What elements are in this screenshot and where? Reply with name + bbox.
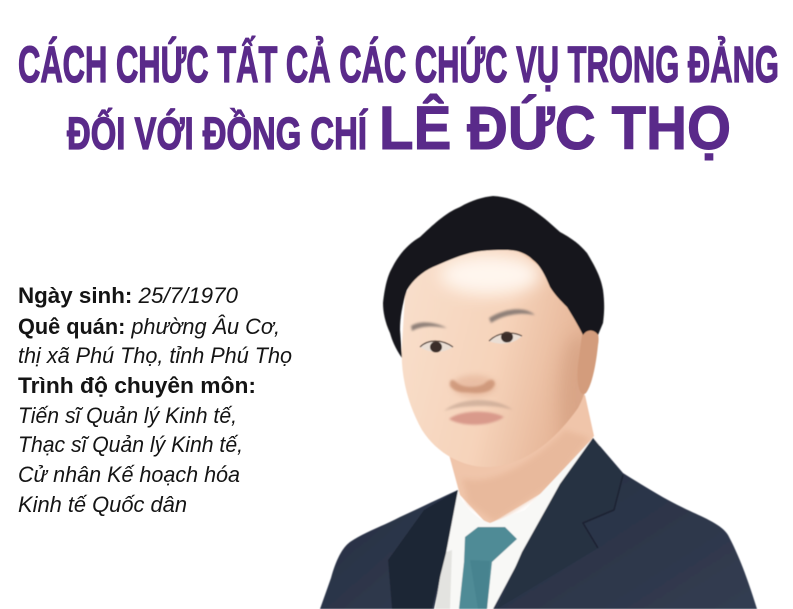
lapel edge [583, 475, 623, 548]
mouth [449, 412, 504, 425]
right eyebrow [489, 309, 535, 323]
left eye [420, 341, 453, 352]
qualification 2: Thạc sĩ Quản lý Kinh tế, [18, 432, 243, 457]
hometown line 2: thị xã Phú Thọ, tỉnh Phú Thọ [18, 343, 292, 368]
hair [383, 196, 604, 358]
qualification 3: Cử nhân Kế hoạch hóa [18, 462, 240, 487]
left lapel [388, 490, 458, 609]
face [402, 245, 591, 467]
title line 2: ĐỐI VỚI ĐỒNG CHÍ [67, 108, 368, 159]
face shading [437, 250, 583, 424]
nose [450, 380, 495, 393]
left eyebrow [411, 322, 447, 331]
qualification heading: Trình độ chuyên môn: [18, 373, 256, 398]
right suit [493, 438, 757, 609]
nose shadow [452, 375, 496, 397]
ear [577, 328, 599, 394]
right eye [489, 332, 522, 344]
hometown: Quê quán: phường Âu Cơ, [18, 314, 280, 339]
left suit [320, 490, 458, 609]
title [18, 35, 779, 162]
lapel [497, 438, 623, 609]
qualification 1: Tiến sĩ Quản lý Kinh tế, [18, 403, 237, 428]
tie [459, 527, 517, 609]
shirt shadow [435, 550, 452, 609]
qualification 4: Kinh tế Quốc dân [18, 492, 187, 517]
shirt [435, 438, 600, 609]
portrait illustration [320, 196, 757, 609]
neck shadow [462, 430, 590, 522]
date of birth: Ngày sinh: 25/7/1970 [18, 283, 238, 308]
biography text block [18, 283, 292, 517]
tie knot shade [470, 560, 490, 609]
cheek shadow [558, 338, 583, 424]
neck [445, 395, 594, 525]
forehead highlight [440, 255, 540, 295]
moustache shadow [444, 400, 513, 411]
title name: LÊ ĐỨC THỌ [379, 94, 731, 162]
